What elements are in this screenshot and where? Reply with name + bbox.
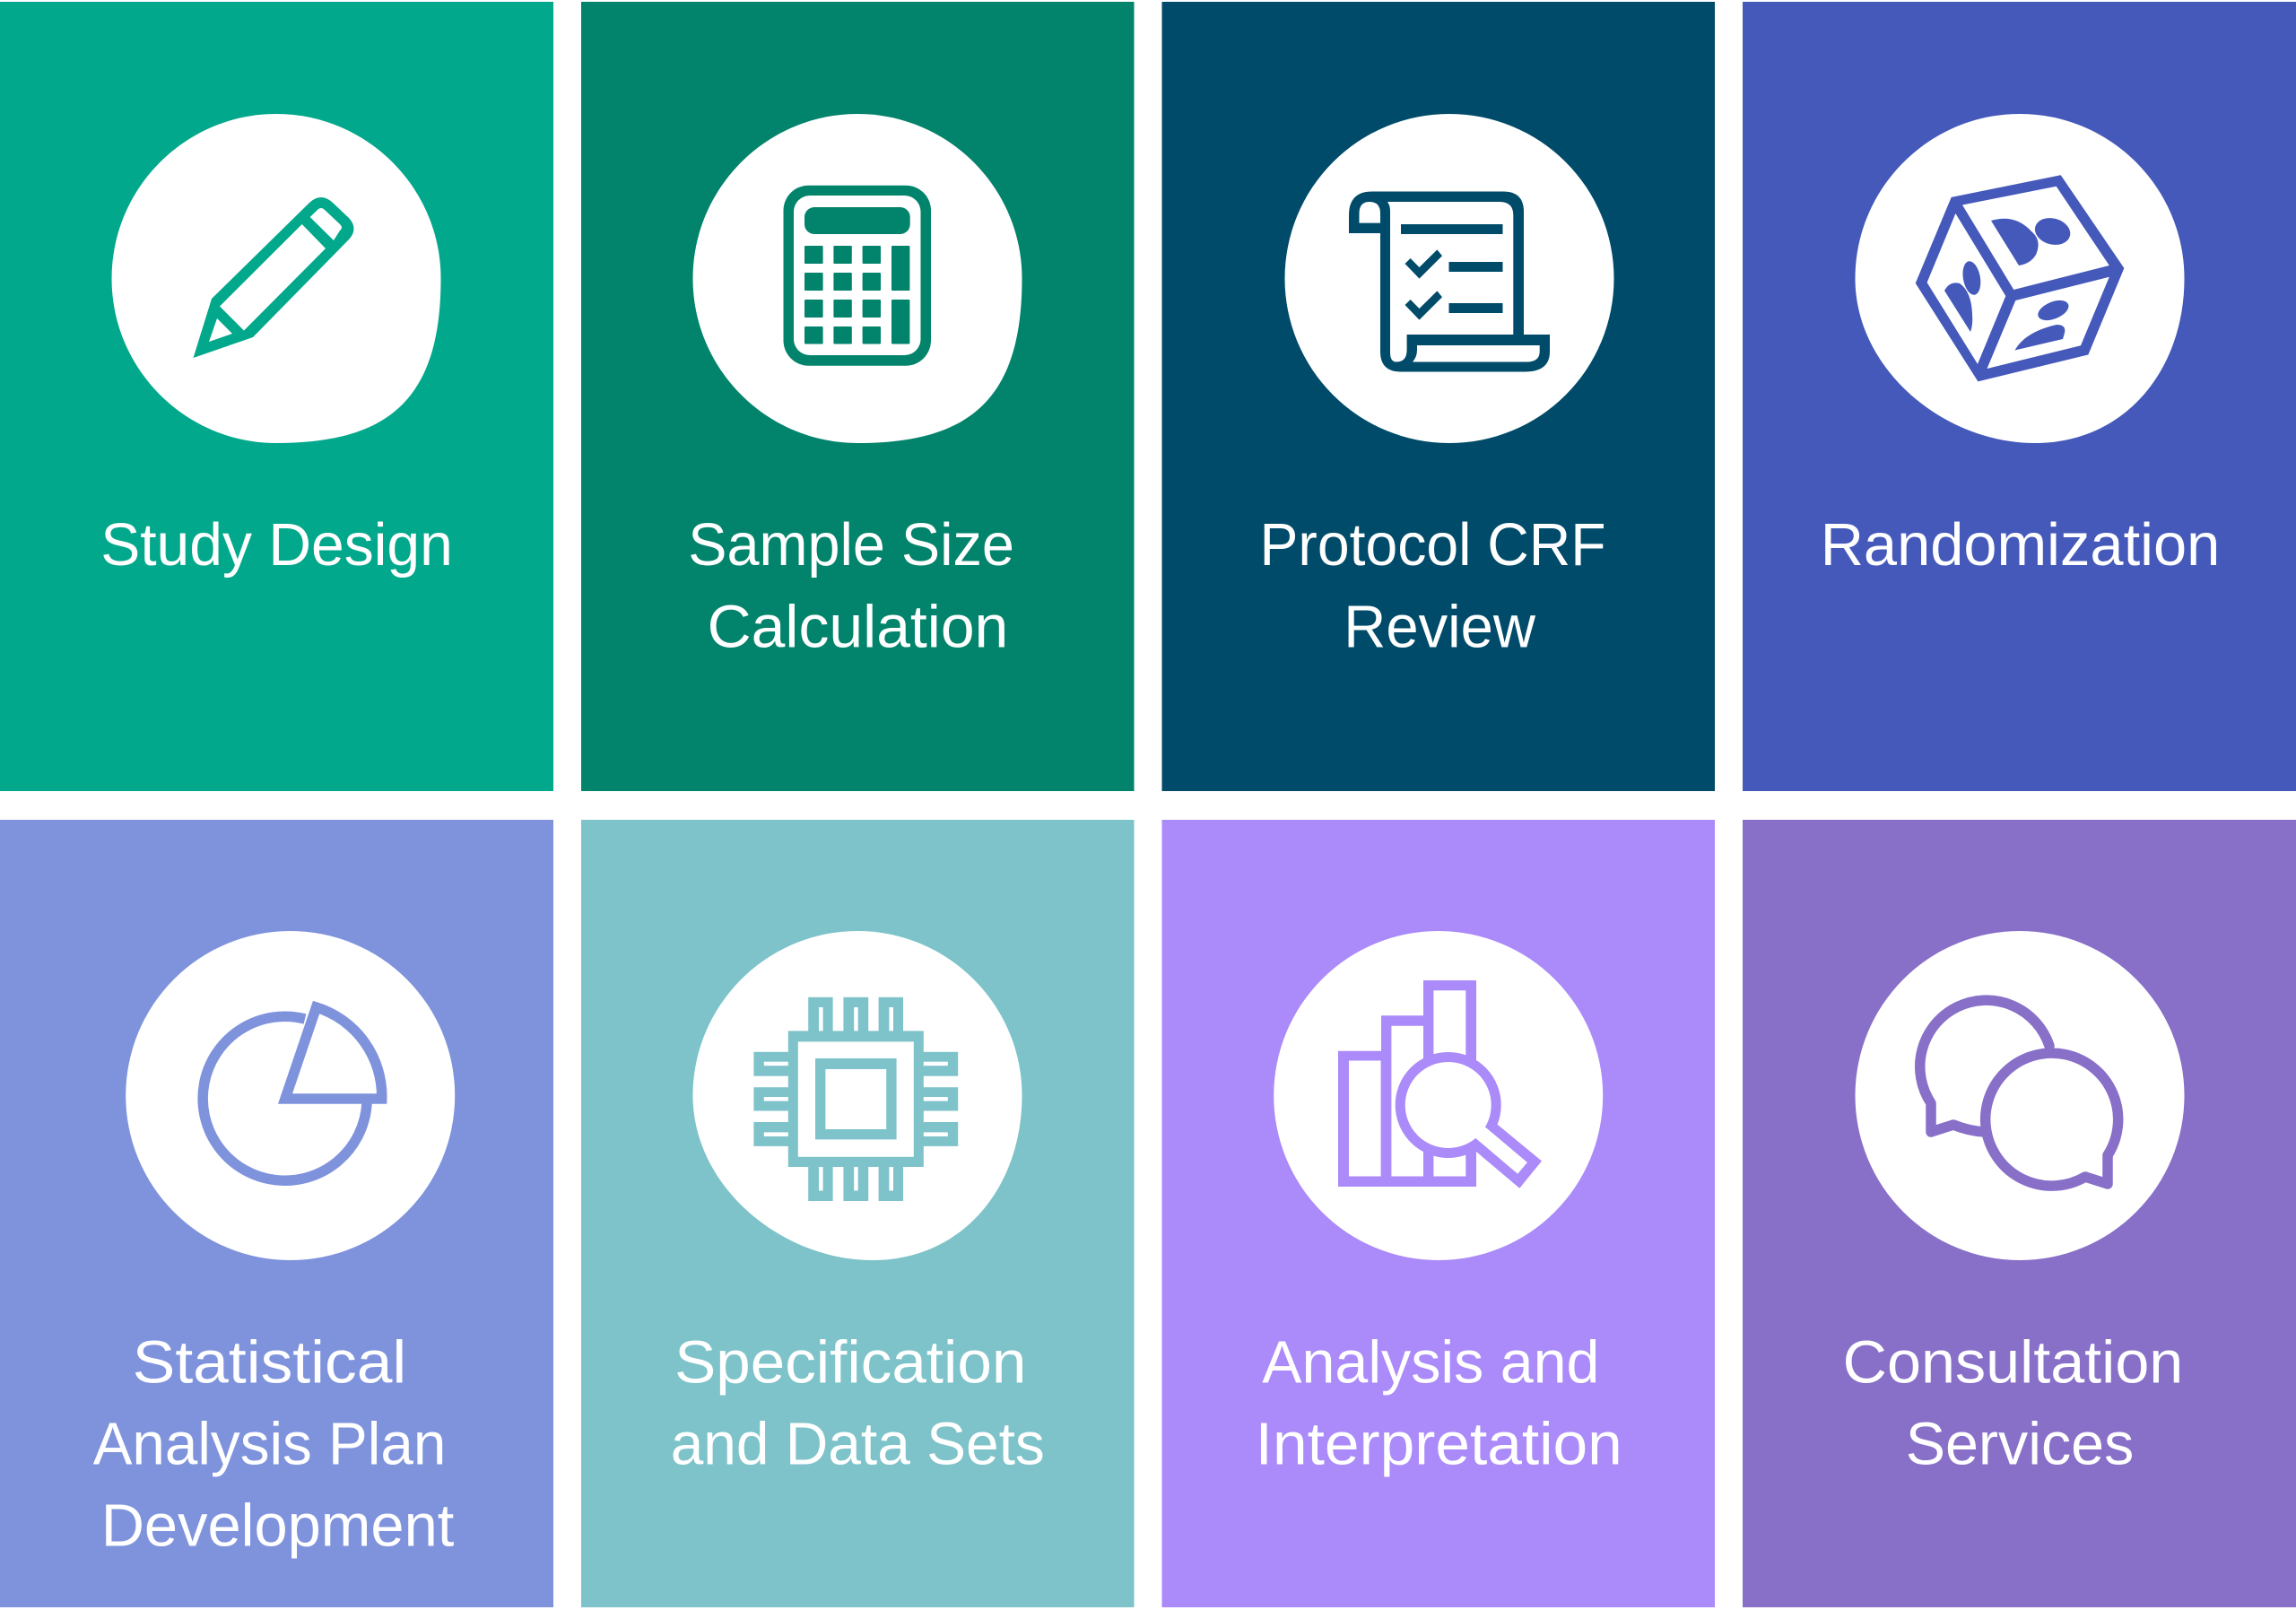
- label: Specification and Data Sets: [671, 1329, 1045, 1478]
- panel background: [0, 2, 553, 791]
- icon: pie chart: [203, 1007, 382, 1180]
- label: Specification and Data Sets: Specification: [674, 1329, 1026, 1396]
- panel background: [581, 820, 1134, 1607]
- label: Analysis and Interpretation: Interpretation: [1256, 1410, 1622, 1478]
- icon: speech bubbles: [1920, 1000, 2118, 1186]
- label: Study Design: Study Design: [100, 511, 453, 579]
- icon: checklist scroll: [1349, 192, 1550, 371]
- white blob: [1855, 931, 2185, 1260]
- label: Statistical Analysis Plan Development: Statistical: [133, 1329, 406, 1396]
- label: Statistical Analysis Plan Development: Analysis Plan: [93, 1410, 446, 1478]
- white blob: [126, 931, 455, 1260]
- white blob: [1855, 114, 2185, 443]
- white blob: [692, 114, 1022, 443]
- label: Specification and Data Sets: and Data Sets: [671, 1410, 1045, 1478]
- white blob: [692, 931, 1022, 1260]
- white blob: [111, 114, 441, 443]
- label: Consultation Services: Consultation: [1843, 1329, 2183, 1396]
- white blob: [1274, 931, 1603, 1260]
- label: Analysis and Interpretation: [1256, 1329, 1622, 1478]
- panel: Protocol CRF Review: [1162, 2, 1715, 791]
- panel: Consultation Services: [1743, 820, 2296, 1607]
- icon: microchip: [753, 997, 958, 1201]
- icon: dice: [1916, 176, 2124, 381]
- label: Statistical Analysis Plan Development: Development: [101, 1493, 455, 1559]
- panel: Sample Size Calculation: [581, 2, 1134, 791]
- label: Sample Size Calculation: Calculation: [708, 594, 1008, 660]
- panel background: [581, 2, 1134, 791]
- label: Sample Size Calculation: Sample Size: [688, 511, 1014, 579]
- label: Randomization: Randomization: [1821, 511, 2220, 579]
- label: Sample Size Calculation: [688, 511, 1014, 660]
- white blob: [1284, 114, 1614, 443]
- label: Consultation Services: [1843, 1329, 2183, 1478]
- panel background: [0, 820, 553, 1607]
- panel: Study Design: [0, 2, 553, 791]
- panel: Specification and Data Sets: [581, 820, 1134, 1607]
- panel background: [1743, 2, 2296, 791]
- panel: Randomization: [1743, 2, 2296, 791]
- panel background: [1162, 2, 1715, 791]
- label: Protocol CRF Review: Review: [1344, 594, 1535, 660]
- icon: bar chart with magnifier: [1338, 980, 1542, 1188]
- icon: calculator: [784, 186, 931, 366]
- panel background: [1162, 820, 1715, 1607]
- label: Statistical Analysis Plan Development: [93, 1329, 455, 1559]
- panel: Analysis and Interpretation: [1162, 820, 1715, 1607]
- label: Protocol CRF Review: Protocol CRF: [1259, 511, 1605, 579]
- panel: Statistical Analysis Plan Development: [0, 820, 553, 1607]
- icon: pencil: [194, 197, 353, 358]
- label: Analysis and Interpretation: Analysis and: [1262, 1329, 1599, 1396]
- label: Consultation Services: Services: [1906, 1410, 2134, 1478]
- label: Protocol CRF Review: [1259, 511, 1605, 660]
- panel background: [1743, 820, 2296, 1607]
